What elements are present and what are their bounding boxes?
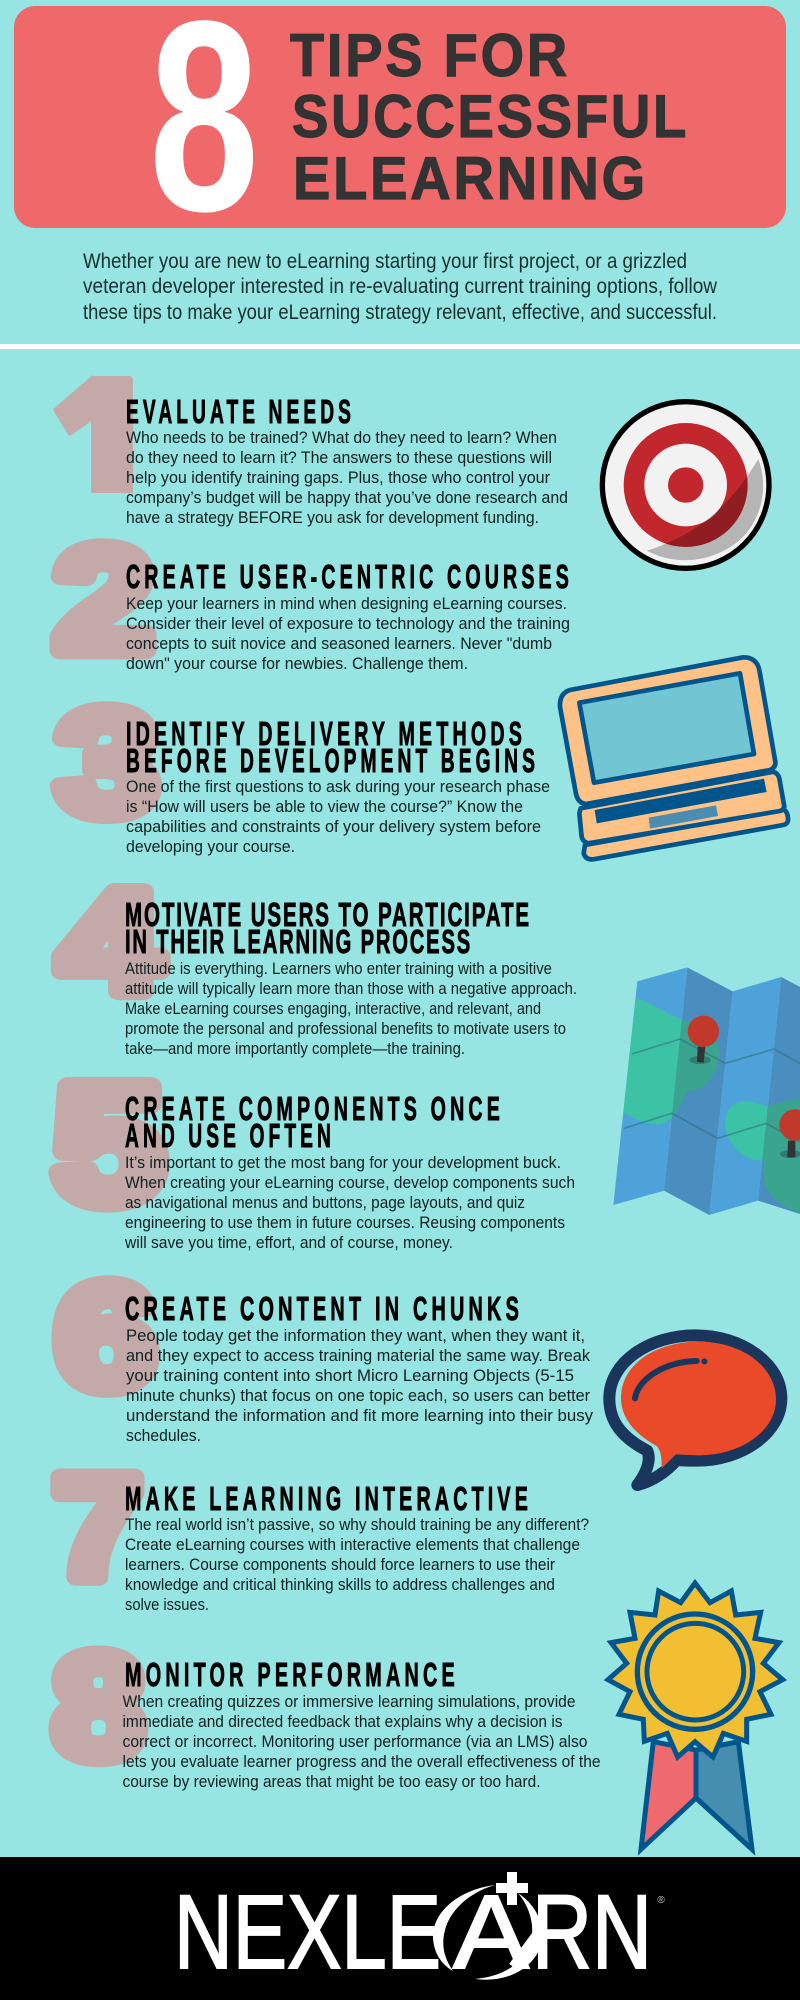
tip 4: promote the personal and professional benefits to motivate users to xyxy=(125,1020,566,1038)
icon: target xyxy=(602,402,769,568)
tip 5: will save you time, effort, and of course, money. xyxy=(124,1234,453,1252)
footer logo bar xyxy=(0,1857,800,2000)
tip 5: AND USE OFTEN xyxy=(125,1117,335,1154)
tip 7: MAKE LEARNING INTERACTIVE xyxy=(125,1480,532,1517)
tip 3: One of the first questions to ask during your research phase xyxy=(126,778,550,796)
tip 5: as navigational menus and buttons, page layouts, and quiz xyxy=(125,1194,525,1212)
tip 8: course by reviewing areas that might be too easy or too hard. xyxy=(122,1773,540,1791)
tip 7: knowledge and critical thinking skills to address challenges and xyxy=(125,1576,555,1594)
tip 8: immediate and directed feedback that explains why a decision is xyxy=(122,1713,562,1731)
tip 8: 8 xyxy=(53,1624,144,1788)
tip 5: It’s important to get the most bang for your development buck. xyxy=(125,1154,561,1172)
footer logo bar: NEXLE xyxy=(174,1874,441,1991)
tip 7 xyxy=(53,1447,589,1614)
tip 1: EVALUATE NEEDS xyxy=(126,393,355,430)
tip 1: 1 xyxy=(66,360,155,516)
title banner: SUCCESSFUL xyxy=(292,83,689,150)
tip 5: CREATE COMPONENTS ONCE xyxy=(125,1090,504,1127)
tip 6: minute chunks) that focus on one topic each, so users can better xyxy=(126,1387,590,1405)
intro text: these tips to make your eLearning strategy relevant, effective, and successful. xyxy=(83,301,717,324)
tip 7: The real world isn’t passive, so why should training be any different? xyxy=(125,1516,589,1534)
tip 4: 4 xyxy=(59,861,161,1022)
tip 1 xyxy=(56,360,568,527)
title banner: TIPS FOR xyxy=(290,22,570,89)
title banner: ELEARNING xyxy=(293,145,648,212)
tip 4 xyxy=(59,861,577,1058)
tip 4: IN THEIR LEARNING PROCESS xyxy=(125,923,472,960)
tip 6: People today get the information they want, when they want it, xyxy=(126,1327,585,1345)
tip 6: understand the information and fit more learning into their busy xyxy=(126,1407,594,1425)
tip 2: Consider their level of exposure to technology and the training xyxy=(126,615,570,633)
tip 7: Create eLearning courses with interactive elements that challenge xyxy=(125,1536,580,1554)
tip 2: down" your course for newbies. Challenge them. xyxy=(126,655,468,673)
tip 6: your training content into short Micro Learning Objects (5-15 xyxy=(126,1367,574,1385)
tip 2: 2 xyxy=(54,517,153,682)
tip 1: Who needs to be trained? What do they need to learn? When xyxy=(126,429,557,447)
tip 6 xyxy=(56,1254,594,1445)
tip 7: solve issues. xyxy=(125,1596,209,1614)
tip 4: attitude will typically learn more than those with a negative approach. xyxy=(125,980,577,998)
tip 8: lets you evaluate learner progress and the overall effectiveness of the xyxy=(122,1753,600,1771)
title banner xyxy=(14,0,786,268)
icon: map xyxy=(613,967,800,1215)
tip 5: engineering to use them in future courses. Reusing components xyxy=(125,1214,565,1232)
intro text: veteran developer interested in re-evaluating current training options, follow xyxy=(83,275,718,298)
tip 3 xyxy=(56,681,550,856)
icon: speech bubble xyxy=(609,1335,781,1485)
tip 6: and they expect to access training material the same way. Break xyxy=(126,1347,591,1365)
tip 6: schedules. xyxy=(126,1427,201,1445)
tip 7: learners. Course components should force learners to use their xyxy=(125,1556,555,1574)
tip 6: 6 xyxy=(56,1254,156,1419)
tip 8: When creating quizzes or immersive learning simulations, provide xyxy=(122,1693,576,1711)
tip 2: concepts to suit novice and seasoned learners. Never "dumb xyxy=(126,635,552,653)
tip 8: correct or incorrect. Monitoring user performance (via an LMS) also xyxy=(122,1733,588,1751)
intro text xyxy=(83,250,718,324)
footer logo bar: ® xyxy=(657,1895,665,1906)
tip 3: 3 xyxy=(56,681,158,846)
tip 1: have a strategy BEFORE you ask for development funding. xyxy=(126,509,539,527)
tip 6: CREATE CONTENT IN CHUNKS xyxy=(125,1290,523,1327)
tip 5: When creating your eLearning course, develop components such xyxy=(125,1174,575,1192)
tip 1: do they need to learn it? The answers to these questions will xyxy=(126,449,552,467)
tip 3: IDENTIFY DELIVERY METHODS xyxy=(126,715,526,752)
tip 4: Attitude is everything. Learners who enter training with a positive xyxy=(125,960,552,978)
tip 1: company’s budget will be happy that you’ve done research and xyxy=(126,489,568,507)
tip 4: Make eLearning courses engaging, interactive, and relevant, and xyxy=(125,1000,541,1018)
footer logo bar: A xyxy=(453,1874,529,1991)
footer logo bar: RN xyxy=(532,1874,652,1991)
tip 4: take—and more importantly complete—the training. xyxy=(125,1040,465,1058)
intro text: Whether you are new to eLearning starting your first project, or a grizzled xyxy=(83,250,687,273)
tip 5 xyxy=(54,1051,575,1252)
icon: laptop xyxy=(560,657,788,859)
tip 3: capabilities and constraints of your delivery system before xyxy=(126,818,541,836)
tip 4: MOTIVATE USERS TO PARTICIPATE xyxy=(125,896,531,933)
tip 7: 7 xyxy=(53,1447,142,1608)
icon: award ribbon xyxy=(608,1583,783,1849)
tip 3: is “How will users be able to view the course?” Know the xyxy=(126,798,523,816)
tip 2: Keep your learners in mind when designing eLearning courses. xyxy=(126,595,567,613)
tip 3: developing your course. xyxy=(126,838,295,856)
tip 5: 5 xyxy=(54,1051,164,1237)
tip 1: help you identify training gaps. Plus, those who control your xyxy=(126,469,550,487)
tip 2 xyxy=(54,517,573,682)
tip 8 xyxy=(53,1624,600,1791)
tip 8: MONITOR PERFORMANCE xyxy=(125,1656,459,1693)
